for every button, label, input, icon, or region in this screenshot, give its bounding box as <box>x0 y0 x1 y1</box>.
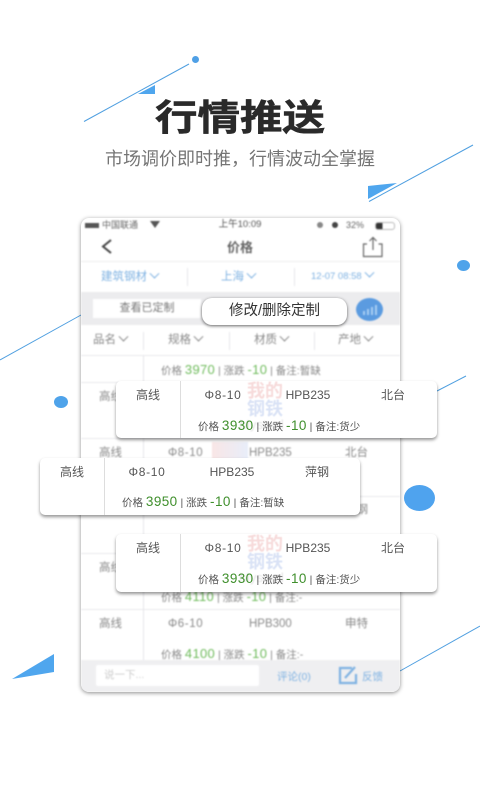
table row: 高线 Φ8-10 北台 <box>99 446 368 459</box>
card: 北台 3930 lower: 价格 3930 | 涨跌 -10 | 备注:货少 <box>198 571 360 586</box>
icon: right small dot <box>457 260 470 271</box>
card: 北台 3930 upper <box>116 381 437 438</box>
popup button: edit or delete <box>202 298 347 325</box>
table row: 高线 Φ8-10 北台: 北台 <box>345 447 368 459</box>
card: 北台 3930 upper: Φ8-10 <box>204 388 242 402</box>
table row: 高线 behind card 3: 高线 <box>99 562 122 574</box>
table row: price 4110: 价格 4110 | 涨跌 -10 | 备注:- <box>161 589 302 604</box>
panel: phone screenshot <box>81 218 400 692</box>
card: 北台 3930 lower: Φ8-10 <box>204 541 242 555</box>
card: 北台 3930 upper: 北台 <box>381 388 405 402</box>
watermark: 我的 <box>247 534 283 554</box>
table header: 规格 <box>168 334 191 346</box>
subtitle: 市场调价即时推，行情波动全掌握 <box>105 149 375 169</box>
navigation bar <box>100 236 384 258</box>
card: 北台 3930 lower: 北台 <box>381 541 405 555</box>
table row: 高线 Φ8-10 北台: 高线 <box>99 447 122 459</box>
table row: price 4100: 价格 4100 | 涨跌 -10 | 备注:- <box>161 646 303 661</box>
table row: 高线 behind card 1: 高线 <box>99 391 122 403</box>
table header: 品名 <box>93 334 116 346</box>
card: 北台 3930 lower: 高线 <box>136 541 160 555</box>
bottom bar: 说一下... <box>104 669 144 681</box>
table row: 高线 Φ6-10 申特: HPB300 <box>249 618 292 630</box>
gray toolbar: 查看已定制 <box>120 302 174 314</box>
popup button: edit or delete: 修改/删除定制 <box>229 303 320 319</box>
watermark <box>239 381 284 432</box>
card: 北台 3930 upper: 高线 <box>136 388 160 402</box>
navigation bar: 价格 <box>227 240 253 255</box>
icon: chart button <box>356 298 383 321</box>
card: 萍钢 3950: Φ8-10 <box>128 465 166 479</box>
watermark: Mysteel <box>239 570 284 585</box>
bottom bar: 评论(0) <box>277 671 311 683</box>
card: 萍钢 3950 <box>40 458 360 515</box>
table row: 高线 Φ6-10 申特 <box>99 616 368 630</box>
filter row <box>101 270 375 283</box>
table row: 高线 Φ6-10 申特: Φ6-10 <box>168 618 203 630</box>
table grid lines <box>81 382 400 383</box>
icon: top triangle <box>138 85 155 94</box>
icon: right triangle <box>368 183 397 199</box>
filter row: 12-07 08:58 <box>311 271 362 282</box>
table header: 产地 <box>338 334 361 346</box>
icon: left dot <box>54 396 68 408</box>
card: 北台 3930 lower <box>116 534 437 592</box>
table header: 材质 <box>254 334 277 346</box>
status bar: 32% <box>346 220 364 230</box>
bottom bar: 反馈 <box>362 671 383 683</box>
card: 北台 3930 upper: 价格 3930 | 涨跌 -10 | 备注:货少 <box>198 418 360 433</box>
table row: 高线 Φ8-10 北台: HPB235 <box>249 447 292 459</box>
table header <box>93 332 374 346</box>
icon: large right dot <box>404 485 435 511</box>
table row: 高线 Φ6-10 申特: 申特 <box>345 618 368 630</box>
table row: 钢 peeking beside card 2: 萍钢 <box>345 504 368 516</box>
watermark <box>239 534 284 585</box>
card: 萍钢 3950: 高线 <box>60 465 84 479</box>
table row: price 3970: 价格 3970 | 涨跌 -10 | 备注:暂缺 <box>161 362 321 377</box>
watermark: Mysteel <box>239 417 284 432</box>
status bar <box>84 218 396 231</box>
card: 北台 3930 upper: HPB235 <box>286 388 330 402</box>
card: 北台 3930 lower: HPB235 <box>286 541 330 555</box>
card: 萍钢 3950: 萍钢 <box>305 465 329 479</box>
icon: bottom left triangle <box>12 654 54 679</box>
watermark: 钢铁 <box>247 552 283 572</box>
table row: 高线 Φ8-10 北台: Φ8-10 <box>168 447 203 459</box>
watermark: 我的 <box>247 381 283 401</box>
status bar: 上午10:09 <box>219 219 261 230</box>
gray toolbar <box>81 292 400 325</box>
title: 行情推送 <box>155 99 325 138</box>
watermark behind row <box>212 442 248 459</box>
filter row: 建筑钢材 <box>101 271 147 283</box>
table row: 高线 Φ6-10 申特: 高线 <box>99 618 122 630</box>
card: 萍钢 3950: 价格 3950 | 涨跌 -10 | 备注:暂缺 <box>122 494 284 509</box>
card: 萍钢 3950: HPB235 <box>210 465 254 479</box>
filter row: 上海 <box>221 271 244 283</box>
icon: top dot <box>192 56 199 63</box>
watermark: 钢铁 <box>247 399 283 419</box>
status bar: 中国联通 <box>102 220 138 230</box>
bottom bar <box>81 660 400 692</box>
